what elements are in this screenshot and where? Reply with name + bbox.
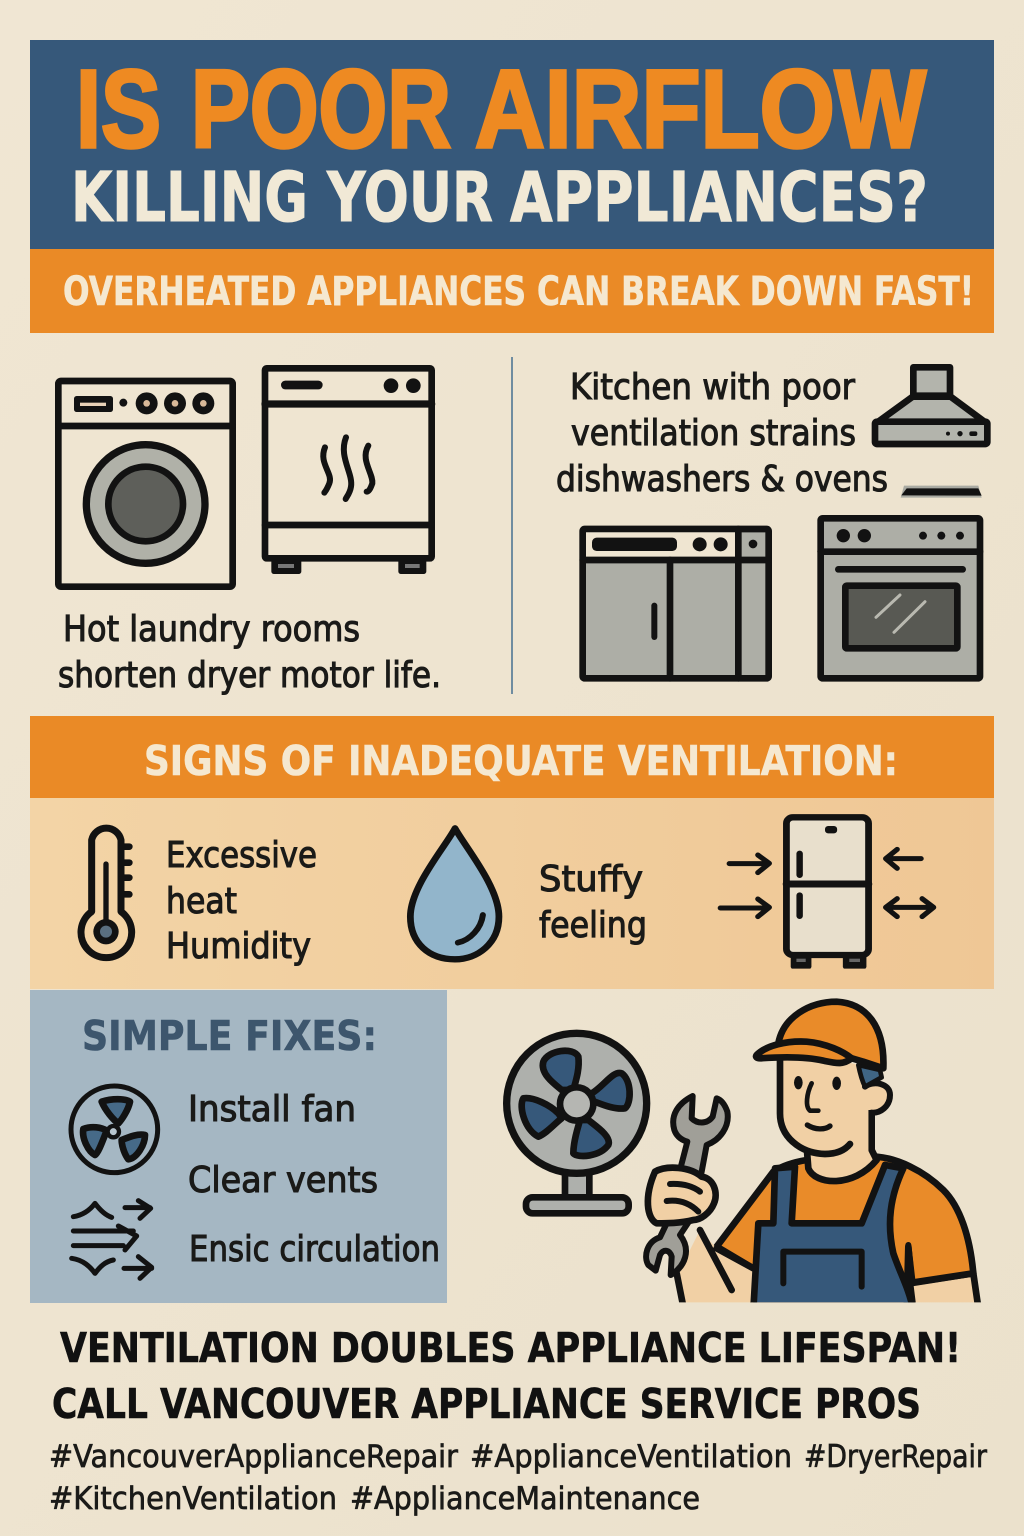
illustration: fan and technician — [507, 1002, 979, 1310]
text: clear vents: Clear vents — [188, 1160, 378, 1201]
icons: drop and fridge — [410, 817, 934, 969]
caption: kitchen: ventilation strains — [571, 413, 856, 454]
panel: signs of inadequate ventilation — [30, 798, 994, 989]
technician forearm — [680, 1234, 754, 1302]
hashtags: #KitchenVentilation — [49, 1481, 337, 1517]
panel: laundry room — [58, 368, 441, 696]
icon: oven — [821, 518, 980, 678]
hair — [858, 1065, 882, 1087]
hand — [648, 1168, 716, 1223]
callout: lifespan message — [52, 1324, 961, 1428]
overalls — [753, 1165, 913, 1310]
text: stuffy feeling: feeling — [539, 905, 647, 946]
hashtags: #ApplianceMaintenance — [350, 1481, 700, 1517]
section banner: signs heading: SIGNS OF INADEQUATE VENTILATION: — [144, 737, 898, 785]
text: excessive heat humidity: Excessive — [166, 835, 317, 876]
icons: washer and dryer — [58, 368, 432, 587]
title line 2: KILLING — [71, 158, 308, 238]
title line 1: POOR — [191, 48, 451, 171]
illustration: desk fan — [507, 1033, 647, 1213]
title line 2 — [71, 158, 928, 238]
face — [783, 1060, 871, 1151]
hashtags: #DryerRepair — [804, 1439, 987, 1475]
caption: laundry: shorten dryer motor life. — [58, 655, 441, 696]
text: stuffy feeling — [539, 859, 647, 946]
icons: kitchen appliances — [583, 367, 987, 678]
caption: kitchen: dishwashers & ovens — [556, 459, 888, 500]
icon: dishwasher — [583, 529, 769, 678]
caption: kitchen — [556, 367, 888, 500]
icon: water drop — [410, 828, 499, 959]
text: circulation: Ensic circulation — [189, 1229, 440, 1270]
panel: simple fixes — [30, 990, 447, 1303]
hashtags: #ApplianceVentilation — [470, 1439, 792, 1475]
neck — [807, 1107, 877, 1181]
text: stuffy feeling: Stuffy — [539, 859, 643, 900]
icons: fan and airflow — [71, 1086, 158, 1278]
technician shirt — [717, 1157, 973, 1310]
icon: thermometer — [81, 828, 132, 958]
cap — [778, 1002, 883, 1068]
heading: simple fixes: SIMPLE FIXES: — [82, 1012, 377, 1060]
text: excessive heat humidity: Humidity — [166, 926, 311, 967]
icon: fan — [71, 1086, 158, 1173]
title line 1 — [76, 48, 926, 171]
text: install fan: Install fan — [188, 1089, 356, 1130]
hashtags: #VancouverApplianceRepair — [49, 1439, 458, 1475]
title line 2: APPLIANCES? — [510, 158, 928, 238]
text: excessive heat humidity: heat — [166, 881, 237, 922]
section banner: signs heading — [30, 716, 994, 798]
title line 2: YOUR — [326, 158, 493, 238]
icon: airflow arrows — [72, 1201, 152, 1278]
illustration: technician with wrench — [646, 1002, 979, 1310]
title line 1: AIRFLOW — [475, 48, 926, 171]
ear — [865, 1083, 890, 1113]
caption: laundry — [58, 609, 441, 696]
icon: washing machine — [58, 381, 233, 587]
caption: kitchen: Kitchen with poor — [570, 367, 855, 408]
panel: kitchen — [556, 367, 987, 678]
title banner — [30, 40, 994, 249]
text: excessive heat humidity — [166, 835, 317, 967]
icon: fridge with arrows — [720, 817, 934, 969]
caption: laundry: Hot laundry rooms — [63, 609, 360, 650]
icon: range hood — [875, 367, 987, 498]
subtitle banner — [30, 249, 994, 333]
title line 1: IS — [76, 48, 161, 171]
hashtags — [49, 1439, 987, 1517]
icon: dryer — [265, 368, 432, 574]
wrench — [646, 1096, 728, 1275]
technician right arm — [910, 1272, 981, 1302]
